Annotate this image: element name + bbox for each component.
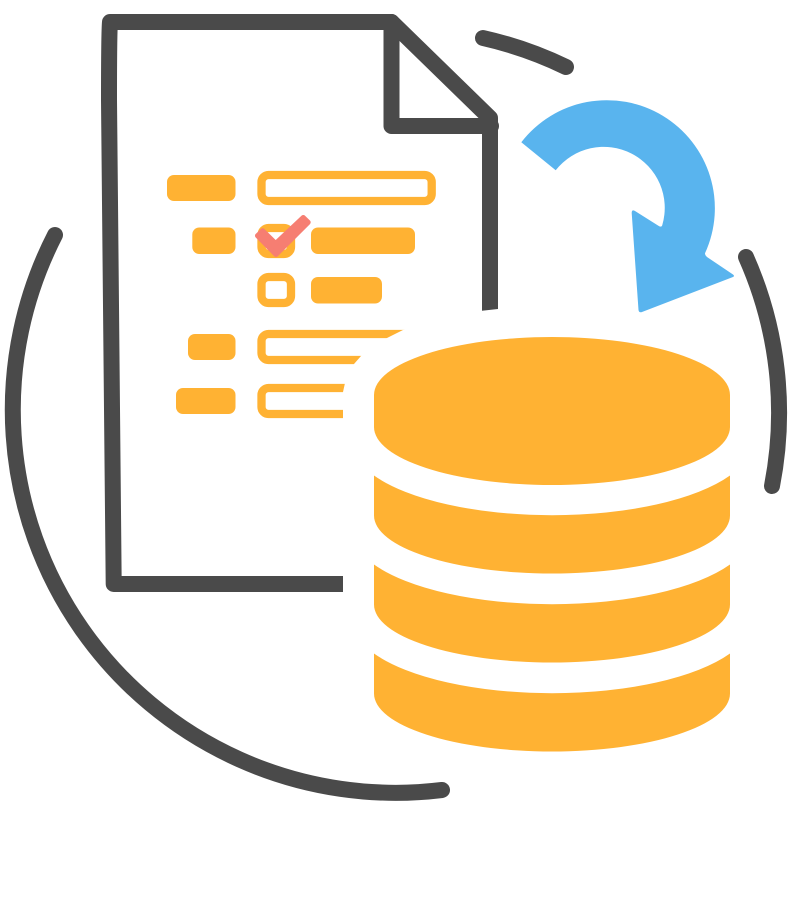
- row 5: label and text box: [176, 388, 432, 414]
- document outline: [109, 22, 491, 584]
- second disc: [374, 476, 730, 574]
- row 3: unchecked box and option: [262, 277, 382, 304]
- third disc: [374, 564, 730, 662]
- row 1: label and text box: [167, 175, 432, 201]
- icon: database: [374, 337, 730, 752]
- bottom disc: [374, 654, 730, 752]
- row 4: label and text box: [188, 334, 432, 360]
- row 2: label, checked box and option: [192, 228, 415, 254]
- circular arcs: [13, 38, 779, 793]
- icon: check mark: [258, 218, 308, 254]
- form fields: [167, 175, 432, 414]
- arrow: curved blue arrow: [521, 100, 734, 312]
- database white backing: [343, 305, 735, 770]
- top disc: [374, 337, 730, 485]
